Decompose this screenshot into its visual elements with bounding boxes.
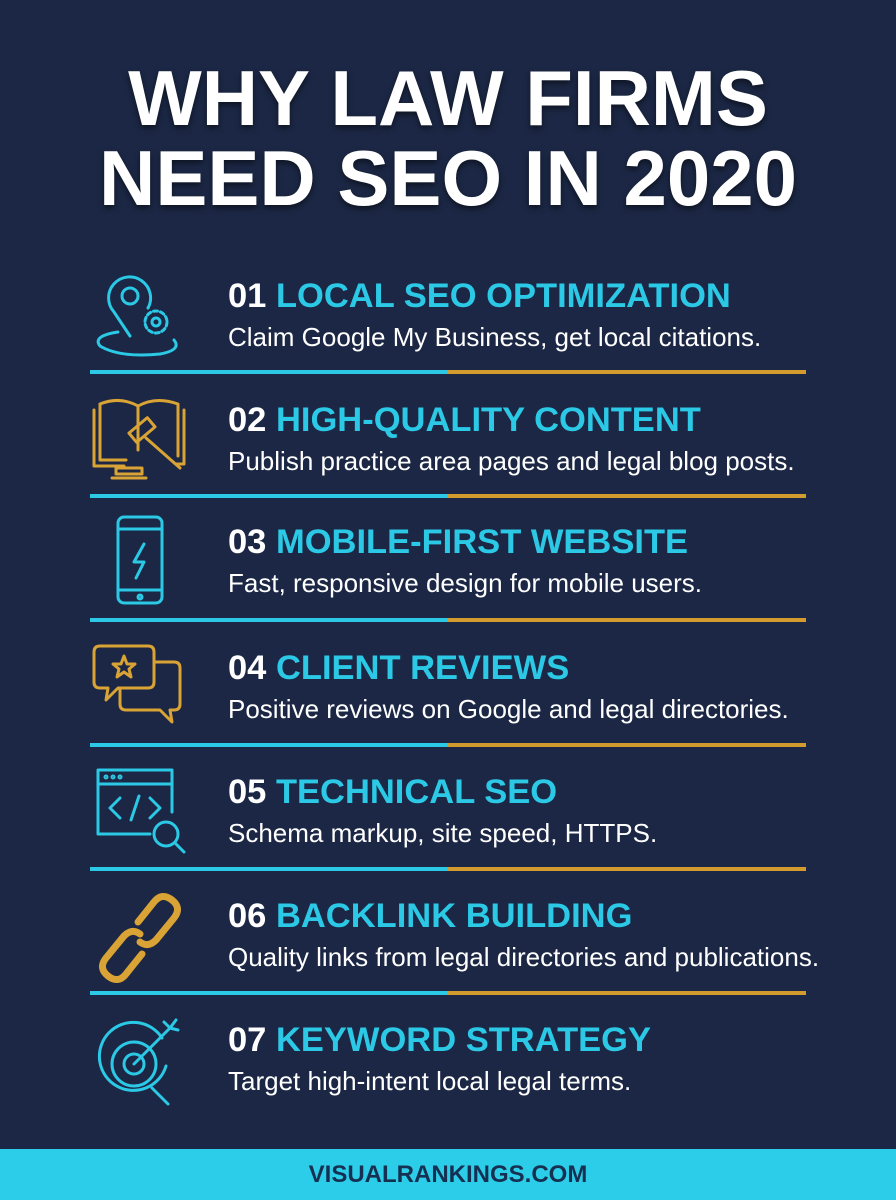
item 07: [98, 1018, 651, 1106]
item 01: [96, 275, 761, 356]
item 04: [92, 644, 789, 724]
icon: book with gavel: [92, 398, 186, 480]
heading 02: 02 HIGH-QUALITY CONTENT: [228, 401, 701, 439]
footer: VISUALRANKINGS.COM: [309, 1161, 587, 1188]
item 03: [116, 516, 702, 604]
icon: chain link: [98, 893, 181, 983]
heading 05: 05 TECHNICAL SEO: [228, 773, 557, 811]
title: [99, 54, 797, 222]
title: NEED SEO IN 2020: [99, 134, 797, 222]
item 05: [96, 768, 657, 854]
item 02: [92, 398, 795, 480]
heading 04: 04 CLIENT REVIEWS: [228, 649, 569, 687]
text 06: Quality links from legal directories and publications.: [228, 942, 819, 972]
text 02: Publish practice area pages and legal blog posts.: [228, 446, 795, 476]
text 03: Fast, responsive design for mobile users.: [228, 568, 702, 598]
text 04: Positive reviews on Google and legal directories.: [228, 694, 789, 724]
icon: location pin with gear: [96, 275, 178, 356]
icon: smartphone with lightning: [116, 516, 164, 604]
footer: [0, 1149, 896, 1200]
item 06: [98, 893, 819, 983]
text 01: Claim Google My Business, get local citations.: [228, 322, 761, 352]
icon: code window with magnifier: [96, 768, 186, 854]
heading 06: 06 BACKLINK BUILDING: [228, 897, 632, 935]
heading 03: 03 MOBILE-FIRST WEBSITE: [228, 523, 688, 561]
text 07: Target high-intent local legal terms.: [228, 1066, 631, 1096]
title: WHY LAW FIRMS: [128, 54, 768, 142]
text 05: Schema markup, site speed, HTTPS.: [228, 818, 657, 848]
icon: review speech bubbles: [92, 644, 182, 724]
heading 01: 01 LOCAL SEO OPTIMIZATION: [228, 277, 731, 315]
heading 07: 07 KEYWORD STRATEGY: [228, 1021, 651, 1059]
icon: target with arrow and magnifier: [98, 1018, 180, 1106]
